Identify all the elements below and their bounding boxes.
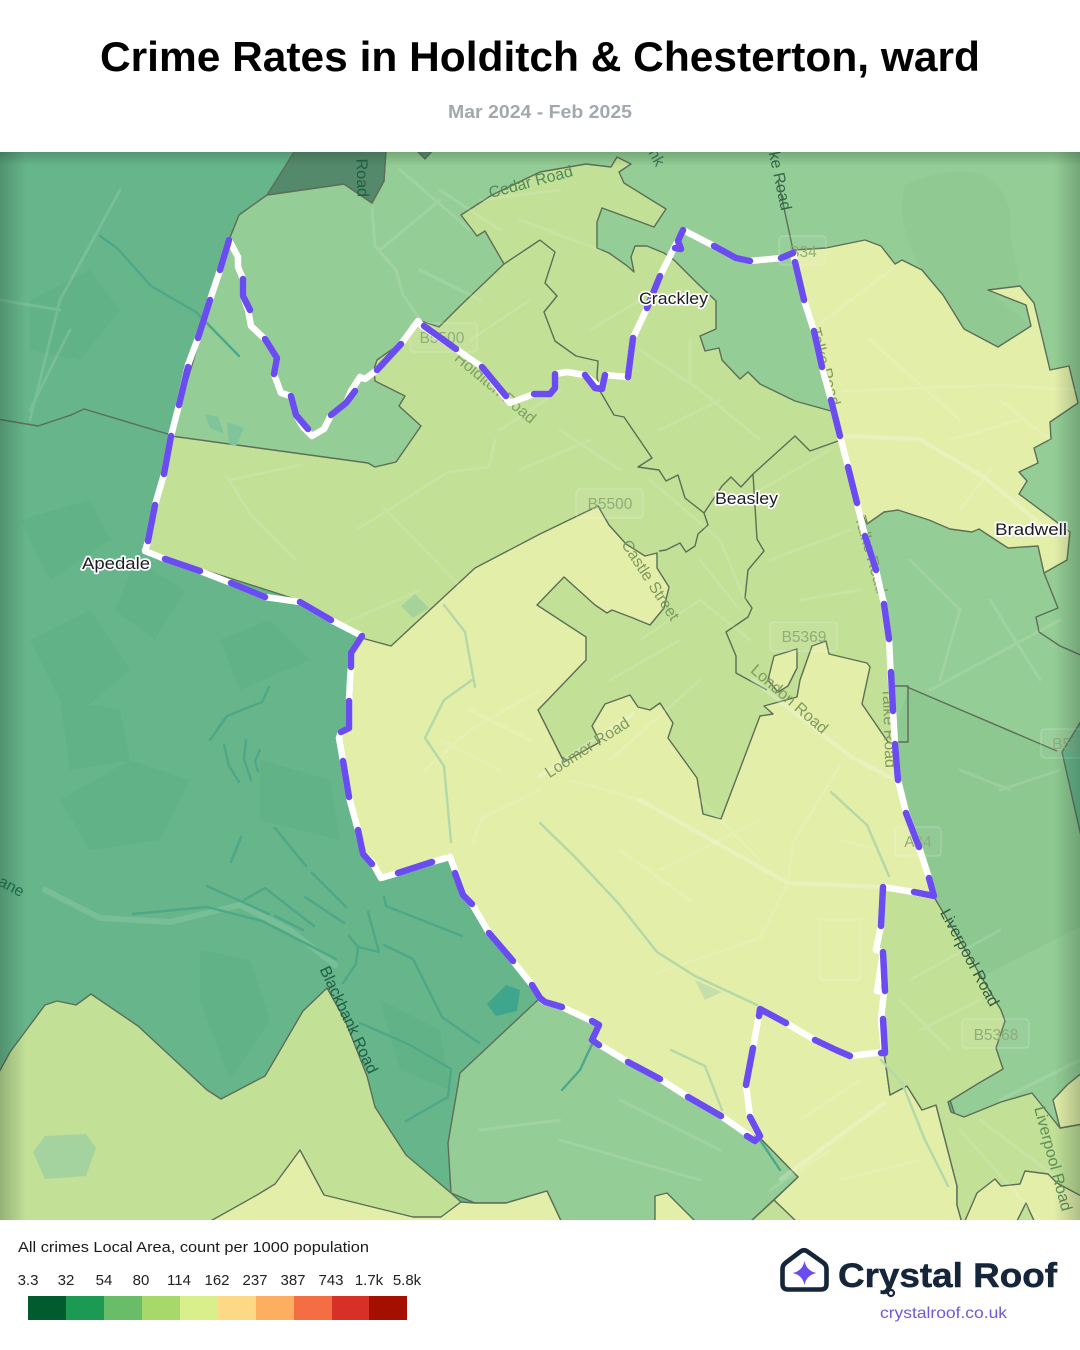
panel: choropleth map bbox=[0, 146, 1080, 1223]
road number plates: A34 bbox=[904, 834, 932, 851]
region: small pale pocket by London Road bbox=[768, 649, 797, 692]
legend values: 3.3 bbox=[18, 1272, 38, 1289]
legend bbox=[18, 1239, 422, 1320]
road name labels: Talke Road bbox=[806, 326, 843, 408]
road number plates: B5500 bbox=[420, 330, 465, 347]
road number plates: B53 bbox=[1052, 736, 1080, 753]
road name labels: Loomer Road bbox=[542, 715, 633, 782]
road name labels: ke Road bbox=[765, 150, 794, 212]
road name labels: London Road bbox=[747, 662, 831, 738]
place labels bbox=[82, 289, 1067, 573]
title: Crime Rates in Holditch & Chesterton, ward bbox=[100, 33, 980, 80]
legend values: 5.8k bbox=[393, 1272, 422, 1289]
legend values: 237 bbox=[242, 1272, 268, 1289]
road name labels bbox=[0, 146, 1074, 1213]
road number plates: B5369 bbox=[782, 629, 826, 646]
region: quarry dark grey-green bbox=[267, 149, 434, 203]
region: south mid green bbox=[448, 998, 798, 1223]
icon: house with star bbox=[782, 1250, 826, 1290]
terrain patches bbox=[20, 270, 450, 1090]
place labels: Beasley bbox=[715, 489, 779, 508]
region: east light green bbox=[876, 887, 1080, 1223]
road number plates: B5368 bbox=[974, 1027, 1018, 1044]
road name labels: Road bbox=[352, 158, 371, 197]
road name labels: Blackbank Road bbox=[316, 964, 380, 1076]
region: south pale inlet bbox=[655, 1193, 697, 1223]
region: south corner light green bbox=[751, 1200, 796, 1220]
region: north-east darker patch bbox=[902, 172, 1031, 347]
region: south-west light green bbox=[0, 988, 461, 1223]
map edge vignette bbox=[0, 152, 1080, 1220]
region: south-east pale pockets bbox=[964, 1072, 1080, 1223]
internal ward boundaries bbox=[0, 180, 1080, 751]
map base: lowest band dark green bbox=[0, 152, 954, 1202]
legend values bbox=[18, 1272, 422, 1289]
legend values: 162 bbox=[204, 1272, 230, 1289]
legend values: 54 bbox=[96, 1272, 112, 1289]
legend values: 387 bbox=[280, 1272, 306, 1289]
road number plates: B34 bbox=[789, 244, 817, 261]
road number plates bbox=[410, 236, 1080, 1048]
legend title: All crimes Local Area, count per 1000 population bbox=[18, 1239, 369, 1256]
legend values: 32 bbox=[58, 1272, 74, 1289]
subtitle: date range: Mar 2024 - Feb 2025 bbox=[448, 102, 632, 122]
region: bottom pale strips bbox=[207, 1150, 562, 1223]
logo: Crystal Roof bbox=[782, 1250, 1058, 1322]
road name labels: Liverpool Road bbox=[936, 906, 1002, 1009]
region: central and west light green bbox=[148, 156, 892, 818]
region: east darker mid green bbox=[893, 687, 1080, 975]
road name labels: Holditch Road bbox=[451, 350, 539, 427]
roads bbox=[0, 170, 1080, 1220]
region: southern pale yellow-green (ward core) bbox=[339, 506, 962, 1223]
road name labels: Liverpool Road bbox=[1030, 1105, 1074, 1213]
ward boundary: purple dashes bbox=[148, 230, 934, 1141]
region: north-east pale bbox=[793, 240, 1078, 573]
logo key ring bbox=[888, 1290, 894, 1296]
waterways and ponds bbox=[33, 236, 948, 1186]
legend values: 80 bbox=[133, 1272, 149, 1289]
legend values: 1.7k bbox=[355, 1272, 384, 1289]
road name labels: nk bbox=[644, 146, 668, 170]
place labels: Bradwell bbox=[995, 520, 1067, 539]
website url: crystalroof.co.uk bbox=[880, 1305, 1008, 1322]
road name labels: Talke Road bbox=[851, 514, 890, 596]
legend values: 114 bbox=[167, 1272, 191, 1289]
logo wordmark: Crystal Roof bbox=[838, 1257, 1058, 1295]
ward boundary: white base line bbox=[145, 230, 934, 1141]
road number plates: B5500 bbox=[588, 496, 633, 513]
place labels: Apedale bbox=[82, 554, 150, 573]
legend values: 743 bbox=[318, 1272, 344, 1289]
region: north and east mid green bbox=[171, 149, 1080, 1130]
road name labels: Talke Road bbox=[879, 688, 898, 768]
place labels: Crackley bbox=[639, 289, 709, 308]
region: east lowest band sliver bbox=[1062, 718, 1080, 845]
road name labels: Castle Street bbox=[617, 537, 682, 624]
legend colour scale bbox=[28, 1296, 407, 1320]
road name labels: Cedar Road bbox=[487, 163, 575, 202]
